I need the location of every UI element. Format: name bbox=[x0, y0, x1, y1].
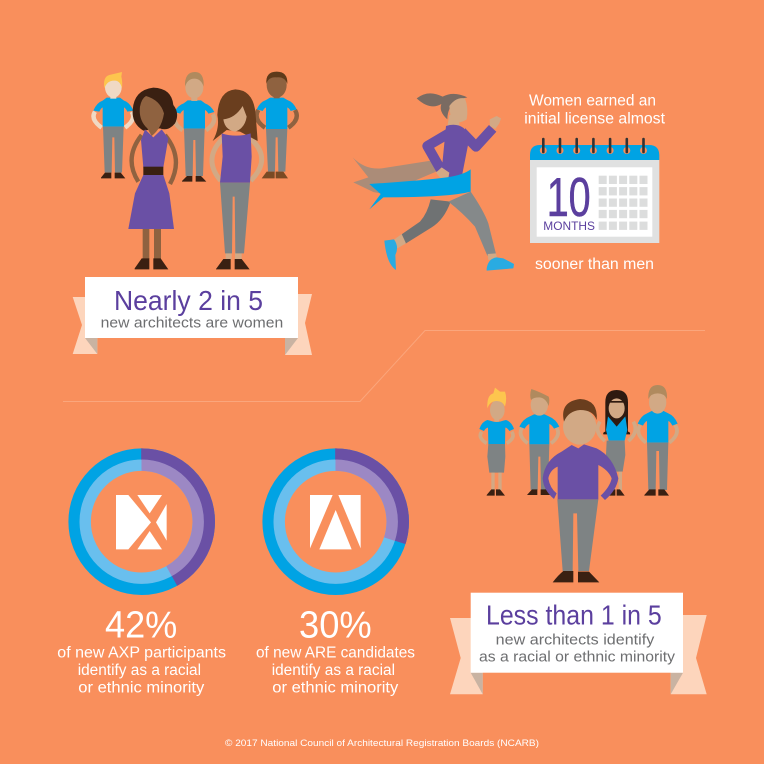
runner front ankle bbox=[488, 253, 497, 260]
figure: woman with black hair bbox=[598, 390, 635, 496]
text: AXP description bbox=[57, 645, 226, 697]
heading: Nearly 2 in 5: Nearly 2 in 5 bbox=[114, 285, 263, 316]
illustration: group of architects with one man in front bbox=[479, 385, 678, 582]
runner hands bbox=[436, 116, 501, 178]
illustration: group of architects with two women bbox=[93, 72, 297, 269]
text: minority description: new architects identify bbox=[496, 631, 655, 648]
panel: less than 1 in 5 minority bbox=[450, 385, 707, 694]
panel: 30% ARE candidates bbox=[256, 454, 415, 697]
runner face bbox=[449, 98, 467, 122]
figure: man on right bbox=[638, 385, 678, 496]
text: ARE description: of new ARE candidates bbox=[256, 645, 415, 662]
icon: ARE logo bbox=[310, 495, 361, 549]
text: ARE description bbox=[256, 645, 415, 697]
panel: 42% AXP participants bbox=[57, 454, 226, 697]
ribbon tail behind runner bbox=[353, 157, 440, 194]
text: women earned an initial license almost bbox=[524, 93, 666, 127]
ribbon: banner behind women callout bbox=[73, 294, 312, 355]
panel: nearly 2 in 5 women bbox=[73, 72, 312, 355]
ribbon: banner behind minority callout bbox=[450, 615, 707, 694]
footer: copyright: © 2017 National Council of Architectural Registration Boards (NCARB) bbox=[225, 738, 539, 749]
figure: woman in dress bbox=[128, 88, 177, 269]
stat: 42%: 42% bbox=[105, 604, 177, 646]
text: women earned an initial license almost: Women earned an bbox=[529, 93, 656, 110]
text: ARE description: or ethnic minority bbox=[272, 680, 399, 697]
figure: dark-skinned man bbox=[257, 72, 297, 178]
illustration: runner crossing finish ribbon bbox=[353, 93, 514, 271]
chart: donut 42% bbox=[74, 454, 209, 589]
figure: blonde man bbox=[93, 72, 133, 178]
text: AXP description: identify as a racial bbox=[78, 662, 201, 679]
figure: man second from left bbox=[519, 389, 559, 495]
text: sooner than men: sooner than men bbox=[535, 256, 654, 273]
runner arms bbox=[427, 128, 493, 169]
panel: 10 months sooner bbox=[353, 93, 666, 273]
icon: calendar showing 10 months: 10 bbox=[547, 166, 591, 228]
text: new architects are women: new architects are women bbox=[101, 315, 283, 332]
stat: 30%: 30% bbox=[299, 604, 372, 646]
text: women earned an initial license almost: initial license almost bbox=[524, 110, 666, 127]
runner back shoe bbox=[384, 239, 397, 270]
heading: Less than 1 in 5: Less than 1 in 5 bbox=[486, 599, 662, 630]
figure: woman in top and trousers bbox=[212, 89, 262, 269]
runner torso bbox=[441, 125, 468, 177]
runner front shoe bbox=[487, 257, 514, 271]
figure: blonde woman bbox=[479, 388, 514, 496]
runner front leg bbox=[448, 192, 496, 256]
figure: main man bbox=[543, 399, 618, 582]
runner ponytail and hair bbox=[417, 93, 467, 119]
callout: white box bbox=[85, 277, 298, 338]
text: minority description bbox=[479, 631, 676, 666]
text: minority description: as a racial or ethnic minority bbox=[479, 649, 676, 666]
figure: man in centre back bbox=[174, 72, 214, 182]
text: ARE description: identify as a racial bbox=[272, 662, 395, 679]
text: AXP description: or ethnic minority bbox=[78, 680, 205, 697]
text: AXP description: of new AXP participants bbox=[57, 645, 226, 662]
runner back ankle bbox=[394, 234, 406, 248]
icon: calendar showing 10 months: MONTHS bbox=[543, 219, 595, 233]
callout: white box bbox=[471, 593, 683, 673]
icon: calendar showing 10 months bbox=[530, 139, 659, 243]
runner back leg bbox=[401, 199, 451, 244]
chart: donut 30% bbox=[268, 454, 403, 589]
finish ribbon bbox=[369, 169, 471, 209]
runner neck bbox=[447, 115, 459, 127]
icon: AXP logo bbox=[116, 495, 167, 549]
